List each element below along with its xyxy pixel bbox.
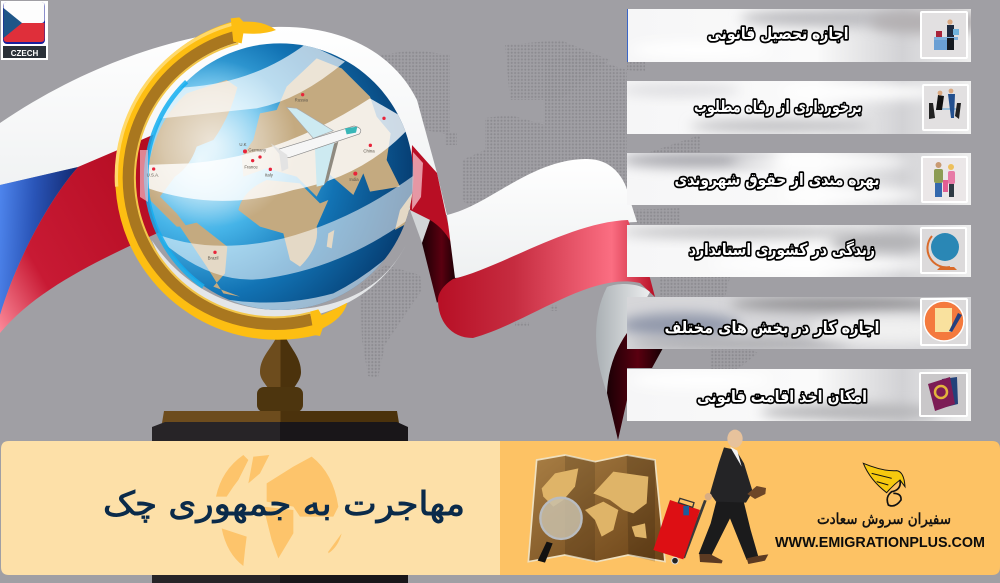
row 1 icon: person at desk (921, 12, 967, 58)
map labels: Italy (265, 173, 274, 178)
ring: pale inner rim (135, 43, 310, 317)
ribbon: white wave (447, 159, 637, 278)
ribbon: gray tail (596, 284, 650, 437)
benefit row 1 (627, 9, 990, 62)
row 4 icon: globe (921, 228, 966, 273)
ring: pale highlight (116, 23, 238, 187)
ribbon: gray shard (410, 210, 430, 243)
banner: title: مهاجرت به جمهوری چک (103, 484, 465, 523)
map labels: China (363, 149, 375, 154)
folded map (528, 455, 665, 562)
map labels: U.S.A. (147, 173, 159, 178)
man: jacket (710, 447, 753, 503)
magnifier (538, 498, 582, 563)
airplane: tail (271, 143, 288, 172)
map labels (147, 98, 375, 260)
title banner panel (1, 441, 500, 575)
ring: brown scale (129, 36, 312, 324)
stand: spindle (260, 338, 301, 390)
map labels: India (349, 177, 359, 182)
row 2 icon: handshake (923, 85, 968, 130)
map labels: France (244, 165, 258, 170)
benefit row 4 (620, 225, 971, 277)
glass crescent (152, 240, 408, 320)
stand: black plinth (152, 422, 408, 583)
row 4 label: زندگی در کشوری استاندارد (689, 240, 875, 259)
flag badge CZECH (1, 1, 48, 60)
logo: website: WWW.EMIGRATIONPLUS.COM (775, 534, 985, 551)
badge: flag (3, 2, 45, 44)
badge: label (3, 46, 46, 58)
stand: wooden base (162, 411, 399, 423)
badge: frame (1, 1, 48, 60)
row 6 icon: passports (920, 373, 967, 416)
benefit row 5 (620, 297, 971, 350)
ribbon: white stripe (0, 27, 447, 215)
row 3 background (620, 152, 971, 205)
logo: persian name: سفیران سروش سعادت (817, 510, 951, 528)
ring: bottom finial (310, 303, 347, 336)
right flag ribbon (410, 145, 663, 440)
banner: left cream panel (1, 441, 500, 575)
man: shoes (699, 554, 768, 564)
dotted world map (360, 40, 758, 378)
banner: faint globe map (216, 455, 342, 566)
logo: bird (863, 463, 905, 506)
translucent bands (143, 43, 417, 313)
row 2 background (620, 81, 971, 134)
ribbon: red wave (438, 220, 655, 338)
row 6 label: امکان اخذ اقامت قانونی (697, 387, 867, 406)
airplane: fuselage (278, 126, 361, 157)
benefit row 3 (620, 152, 971, 205)
airplane (271, 107, 361, 187)
row 3 icon: family (922, 157, 967, 202)
benefit row 6 (627, 369, 971, 421)
walking man (699, 430, 768, 564)
cyan rim on the left limb (146, 82, 203, 287)
airplane: lower wing (315, 140, 335, 187)
glass equator band right (412, 152, 423, 210)
map labels: Russia (295, 98, 308, 103)
ribbon: red stripe (0, 134, 175, 333)
airplane: upper wing (287, 107, 333, 138)
row 4 background (620, 225, 971, 277)
ribbon: blue triangle (0, 167, 78, 315)
man: head (727, 430, 743, 448)
man: shirt collar (730, 447, 742, 467)
map labels: Brazil (208, 255, 219, 260)
row 5 background (620, 297, 971, 350)
banner: right amber panel (500, 441, 1000, 575)
sphere with continents (130, 40, 417, 313)
map labels: Germany (248, 148, 267, 153)
map star markers (152, 93, 386, 254)
ring: top finial (231, 17, 276, 43)
continents (148, 58, 413, 297)
glass equator band left (140, 150, 148, 202)
ring: yellow band (125, 30, 317, 330)
company logo (775, 463, 985, 551)
airplane: wing shadow (320, 142, 338, 187)
man: hand with passport (747, 486, 766, 499)
travel illustration (528, 430, 768, 564)
airplane: cockpit (345, 127, 357, 134)
ribbon: fold red (410, 145, 453, 247)
ribbon: dark fold (422, 220, 458, 303)
row 6 background (627, 369, 971, 421)
row 3 label: بهره مندی از حقوق شهروندی (674, 170, 880, 189)
highlight over left hemisphere (149, 64, 290, 222)
stand: collar (257, 387, 303, 412)
map labels: U.K (239, 142, 247, 147)
man: legs (699, 500, 758, 560)
row 5 icon: document (921, 299, 967, 345)
man: back hand (705, 493, 712, 500)
ribbon: dark tail (607, 333, 663, 440)
row 2 label: برخورداری از رفاه مطلوب (694, 97, 862, 116)
left flag ribbon (0, 27, 447, 333)
row 1 label: اجازه تحصیل قانونی (708, 24, 848, 43)
badge: text: CZECH (11, 49, 38, 58)
globe stand (152, 338, 408, 583)
globe (130, 40, 417, 320)
row 1 background (627, 9, 990, 62)
row 5 label: اجازه کار در بخش های مختلف (664, 318, 880, 337)
red suitcase (653, 498, 707, 564)
gold meridian ring (116, 17, 347, 336)
benefit row 2 (620, 81, 971, 134)
